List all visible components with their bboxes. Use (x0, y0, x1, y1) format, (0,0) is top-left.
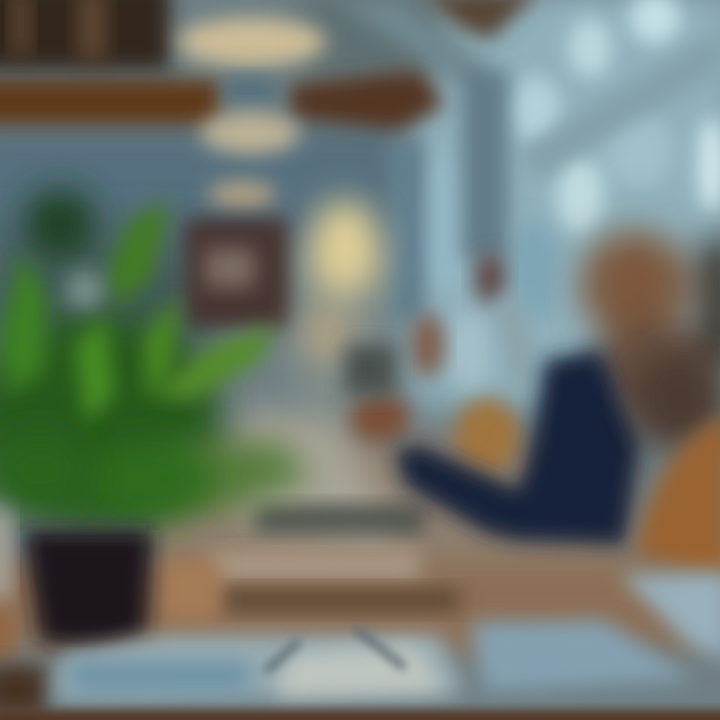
plant pot (24, 530, 153, 646)
paper: blue left part (70, 660, 250, 692)
plant foliage (0, 189, 310, 525)
person: neck and shoulder shade (630, 350, 720, 450)
person: navy torso and arm (395, 350, 640, 545)
lamp: lower (208, 180, 276, 210)
grey structural beams (335, 0, 720, 320)
paper: left sheet (55, 635, 465, 700)
lamp cord shade (225, 78, 275, 106)
wooden ceiling beam (0, 0, 540, 130)
pen marks (265, 628, 405, 672)
left edge table and wall (0, 510, 46, 715)
paper: bright highlight (275, 645, 445, 697)
lamp: top (178, 18, 326, 66)
orange chair back (centre) (455, 399, 519, 471)
window panes (421, 0, 720, 390)
pendant lamps (178, 18, 326, 210)
person: hair (580, 230, 720, 420)
orange chair (right) (635, 415, 720, 585)
glowing light (303, 200, 381, 363)
hands and phone (345, 252, 540, 442)
table (0, 410, 700, 650)
table front edge (0, 710, 720, 720)
paper: far right sheet (620, 572, 720, 660)
paper: right sheet (470, 620, 695, 692)
lamp: middle (200, 112, 300, 154)
dark brown cabinet (185, 218, 290, 328)
papers on table (55, 572, 720, 700)
